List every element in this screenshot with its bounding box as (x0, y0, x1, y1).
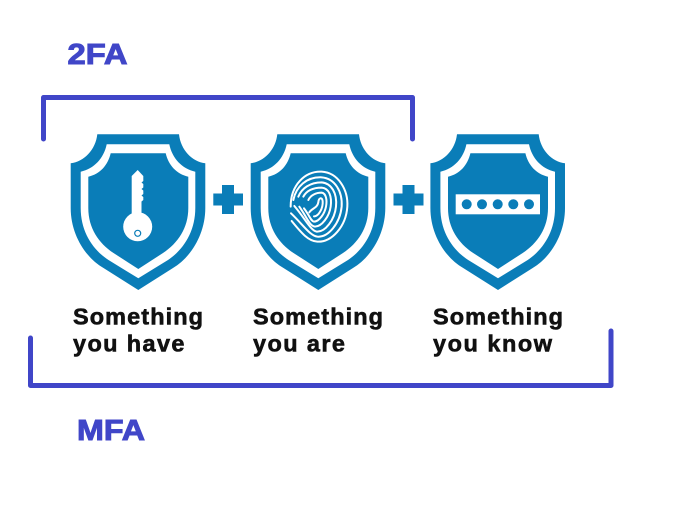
icon: key (123, 170, 152, 241)
shield: key (71, 134, 205, 290)
bracket: 2FA spans first two factors (44, 98, 412, 139)
label: something you have: you have (73, 331, 184, 357)
plus sign 1 (213, 185, 243, 214)
label: something you have: Something (73, 304, 203, 330)
label: something you know: Something (433, 304, 563, 330)
plus sign 2 (394, 185, 424, 214)
label: something you are (253, 304, 383, 357)
label: something you are: Something (253, 304, 383, 330)
label: something you have (73, 304, 203, 357)
heading: 2FA: 2FA (68, 39, 128, 71)
label: something you are: you are (253, 331, 345, 357)
icon: password field (456, 194, 540, 214)
label: something you know: you know (433, 331, 553, 357)
heading: MFA: MFA (77, 415, 145, 447)
icon: fingerprint (291, 172, 347, 242)
label: something you know (433, 304, 563, 357)
shield: fingerprint (251, 134, 385, 290)
bracket: MFA spans all three factors (30, 331, 611, 386)
shield: password (430, 134, 565, 290)
